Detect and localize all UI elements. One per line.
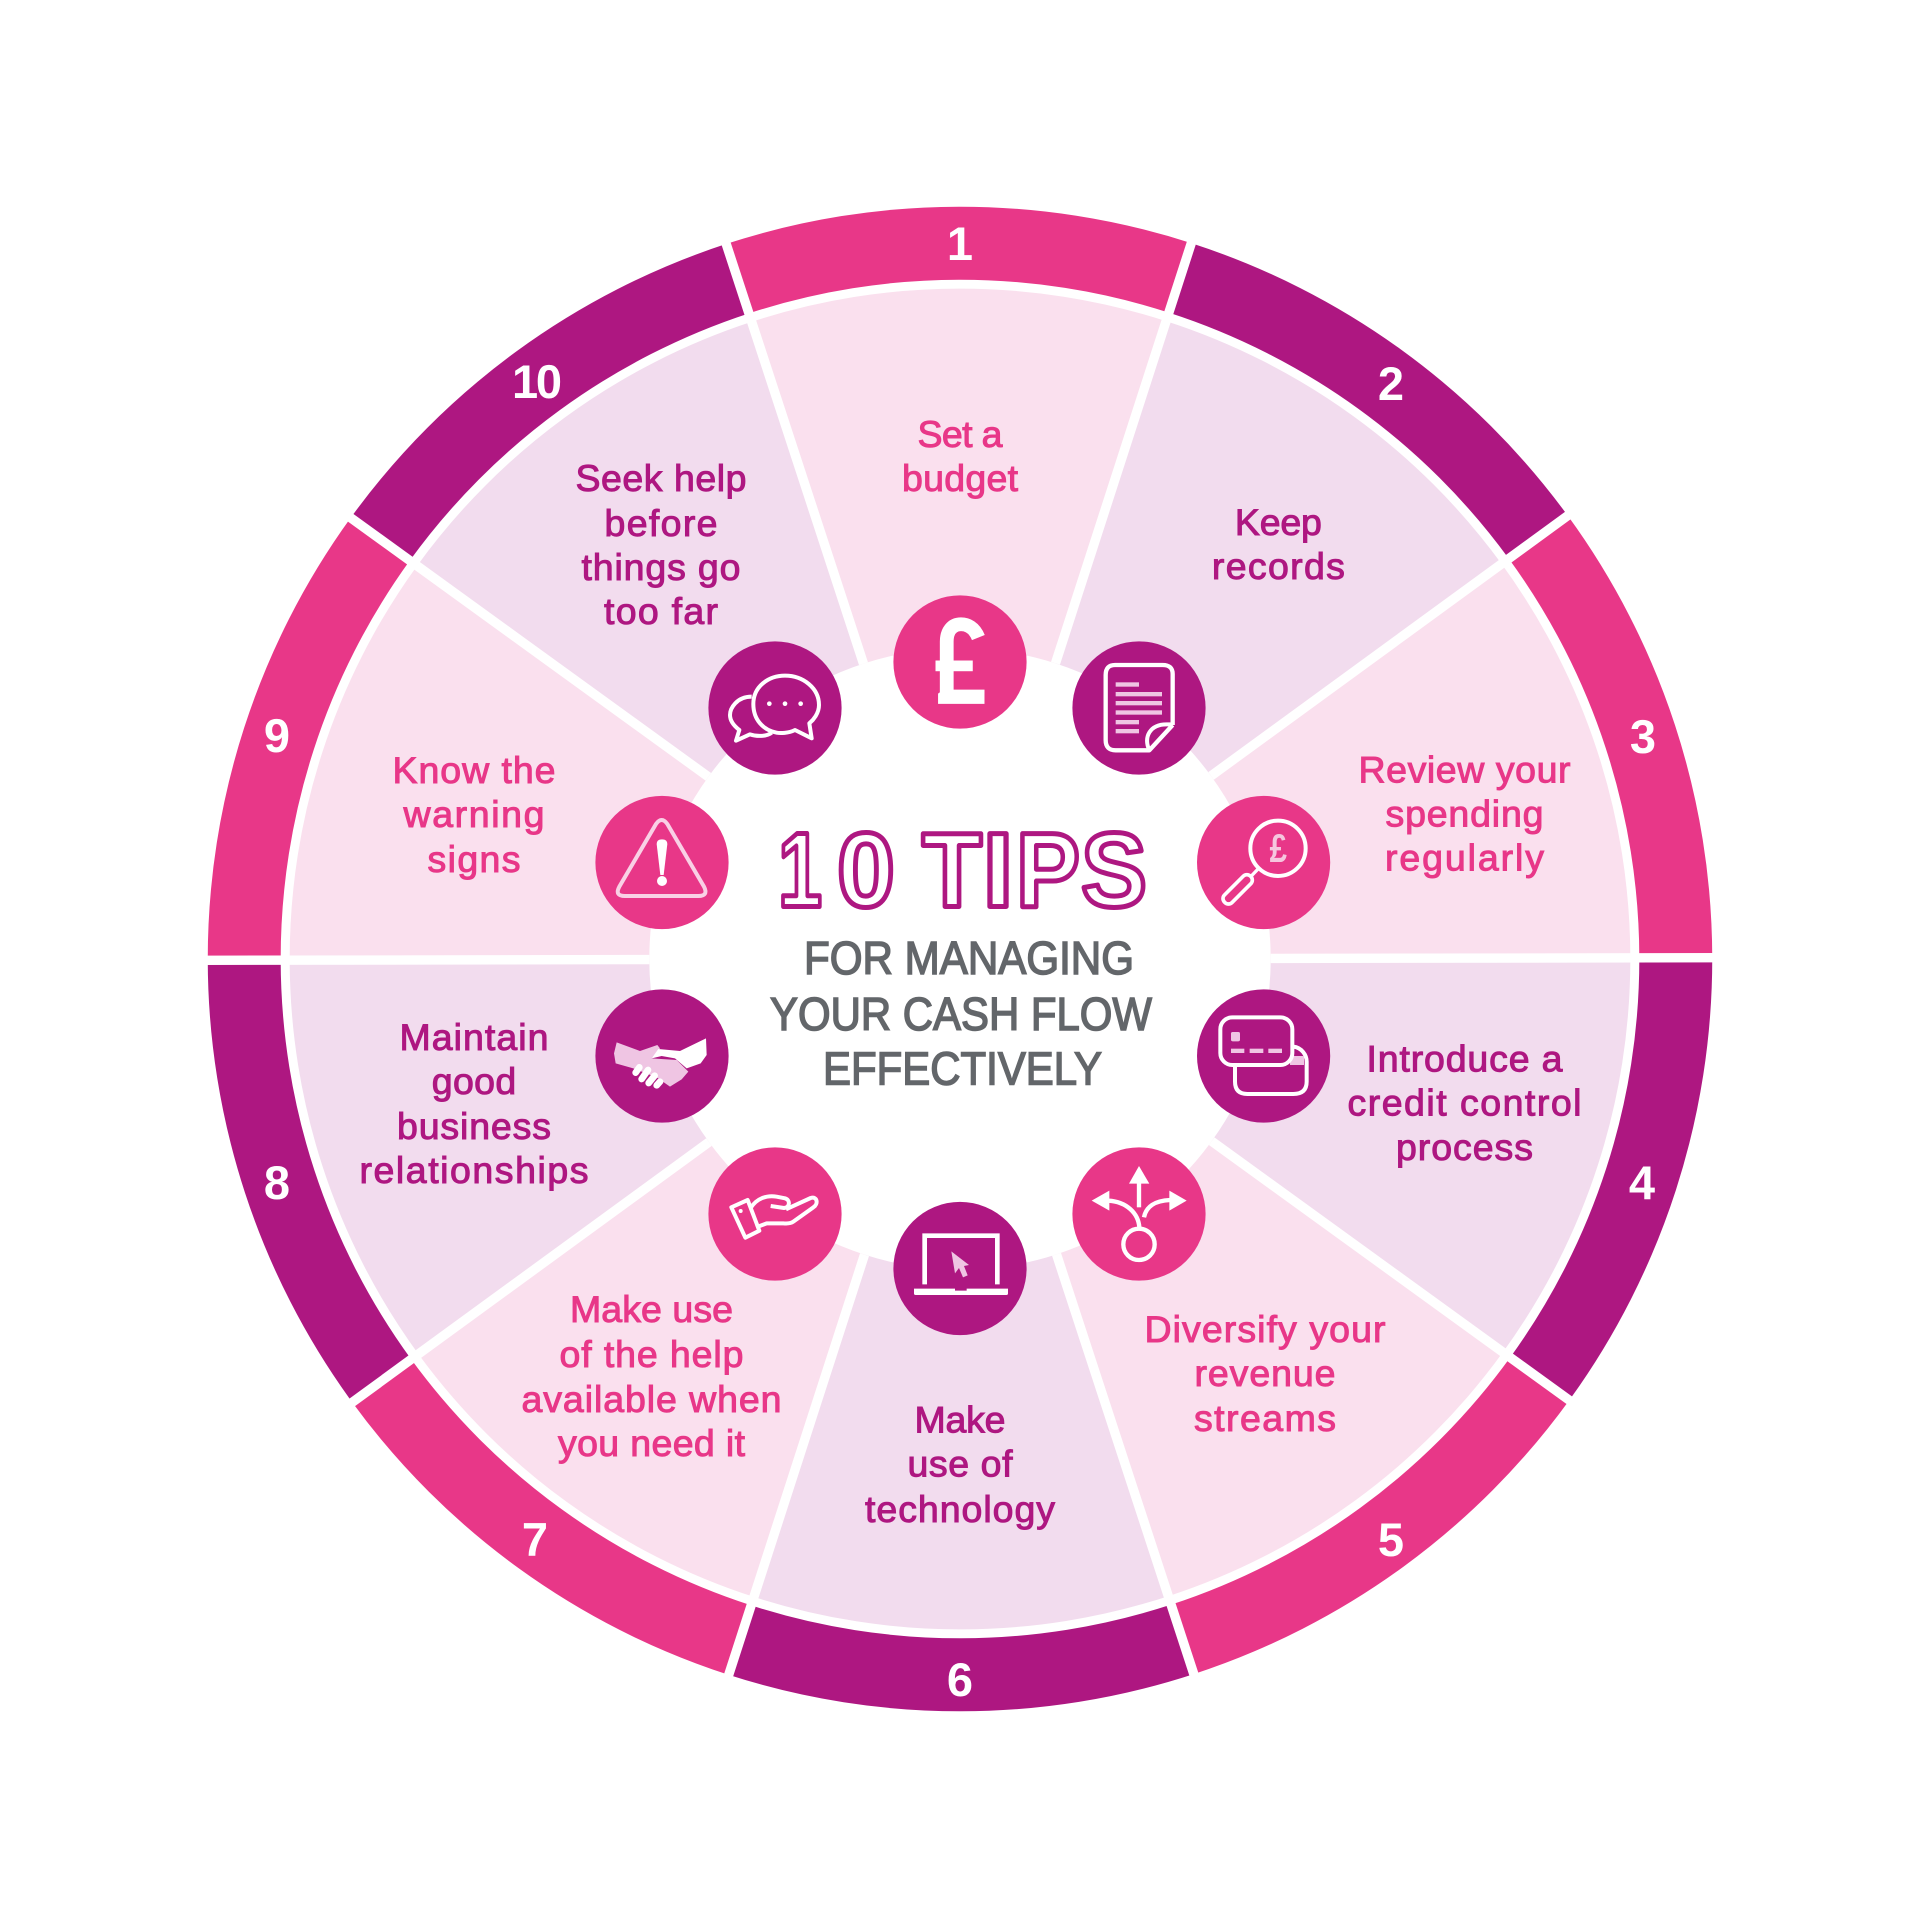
segment 8: maintain good business relationships	[208, 959, 709, 1402]
subtitle: YOUR CASH FLOW	[770, 988, 1153, 1040]
segment 10: seek help before things go too far	[350, 244, 864, 777]
icon: pound	[893, 595, 1027, 729]
icon: document	[1072, 641, 1206, 775]
segment 8: maintain good business relationships: good	[432, 1060, 516, 1102]
icon: open hand	[708, 1147, 842, 1281]
title: 10 TIPS: S	[1081, 812, 1147, 930]
title: 10 TIPS: I	[982, 812, 1014, 930]
segment 4: introduce a credit control process: 4	[1629, 1156, 1655, 1209]
segment 2: keep records: records	[1212, 545, 1345, 587]
segment 8: maintain good business relationships: 8	[264, 1156, 290, 1209]
segment 9: know the warning signs: signs	[428, 838, 520, 880]
segment 4: introduce a credit control process: Introduce a	[1366, 1037, 1563, 1079]
title: 10 TIPS: T	[922, 812, 982, 930]
segment 4: introduce a credit control process: credit control	[1348, 1082, 1582, 1124]
icon: diverging arrows	[1072, 1147, 1206, 1281]
segment 3: review your spending regularly	[1211, 516, 1712, 959]
segment 6: make use of technology: technology	[865, 1488, 1055, 1530]
segment 9: know the warning signs: 9	[264, 709, 290, 762]
segment 7: make use of the help available: Make use	[570, 1288, 733, 1330]
segment 4: introduce a credit control process	[1211, 958, 1713, 1400]
icon: speech bubbles	[708, 641, 842, 775]
segment 8: maintain good business relationships: business	[397, 1105, 551, 1147]
segment 1: set a budget: 1	[947, 217, 973, 270]
segment 10: seek help before things go too far: 10	[512, 355, 562, 408]
segment 5: diversify your revenue streams: 5	[1378, 1513, 1404, 1566]
segment 1: set a budget: budget	[902, 457, 1019, 499]
segment 9: know the warning signs: Know the	[392, 749, 556, 791]
segment 3: review your spending regularly: Review your	[1358, 748, 1570, 790]
segment 5: diversify your revenue streams: Diversify your	[1144, 1308, 1386, 1350]
segment 3: review your spending regularly: spending	[1386, 792, 1544, 834]
icon: magnifying glass	[1197, 796, 1330, 929]
subtitle: FOR MANAGING	[804, 932, 1134, 984]
segment 2: keep records: 2	[1378, 357, 1404, 410]
title: 10 TIPS: 0	[837, 812, 895, 930]
title: 10 TIPS: P	[1016, 812, 1080, 930]
icon: magnifying glass: £	[1270, 827, 1287, 871]
segment 10: seek help before things go too far: too far	[604, 590, 718, 632]
subtitle: EFFECTIVELY	[823, 1042, 1102, 1094]
segment 2: keep records	[1055, 242, 1568, 776]
segment 3: review your spending regularly: 3	[1630, 710, 1656, 763]
segment 10: seek help before things go too far: before	[604, 502, 718, 544]
segment 7: make use of the help available	[352, 1142, 865, 1676]
segment 8: maintain good business relationships: relationships	[360, 1149, 588, 1191]
segment 6: make use of technology: 6	[947, 1653, 973, 1706]
segment 2: keep records: Keep	[1235, 501, 1322, 543]
icon: credit cards	[1197, 989, 1330, 1123]
segment 5: diversify your revenue streams	[1056, 1141, 1570, 1674]
segment 7: make use of the help available: 7	[522, 1513, 548, 1566]
segment 7: make use of the help available: of the help	[560, 1333, 744, 1375]
segment 10: seek help before things go too far: things go	[582, 546, 740, 588]
segment 6: make use of technology	[729, 1254, 1194, 1712]
segment 9: know the warning signs: warning	[402, 793, 544, 835]
icon: warning triangle	[595, 796, 729, 929]
segment 6: make use of technology: use of	[908, 1443, 1013, 1485]
icon: handshake	[595, 989, 729, 1123]
segment 7: make use of the help available: you need it	[558, 1422, 746, 1464]
segment 5: diversify your revenue streams: streams	[1194, 1397, 1336, 1439]
segment 3: review your spending regularly: regularly	[1385, 837, 1544, 879]
segment 1: set a budget	[726, 206, 1191, 664]
segment 9: know the warning signs	[207, 518, 709, 960]
segment 1: set a budget: Set a	[918, 413, 1003, 455]
title: 10 TIPS: 1	[778, 812, 822, 930]
segment 10: seek help before things go too far: Seek help	[576, 457, 746, 499]
segment 6: make use of technology: Make	[914, 1399, 1006, 1441]
segment 4: introduce a credit control process: process	[1396, 1126, 1533, 1168]
segment 8: maintain good business relationships: Maintain	[400, 1016, 548, 1058]
segment 7: make use of the help available: available when	[522, 1378, 782, 1420]
icon: laptop	[893, 1202, 1027, 1335]
segment 5: diversify your revenue streams: revenue	[1194, 1352, 1336, 1394]
